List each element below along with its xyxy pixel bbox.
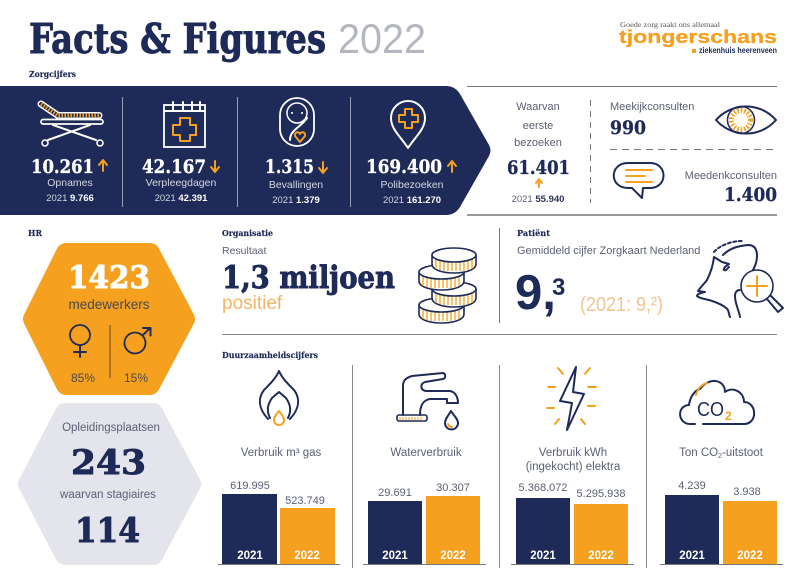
icon: location pin with cross	[391, 101, 425, 148]
panel: CO2 emissions: 2	[718, 453, 722, 460]
panel: training places hexagon: 243	[71, 443, 146, 483]
panel: organisation result: positief	[222, 293, 283, 314]
bar chart: electricity: 5.368.072	[519, 482, 567, 494]
stat: Opnames: 2021 9.766	[46, 193, 94, 204]
title: 2022	[338, 15, 426, 62]
panel: organisation result	[222, 228, 476, 323]
stat: first visits: eerste	[523, 120, 553, 132]
stat: Bevallingen: 1.315	[265, 156, 314, 178]
panel: patient score	[515, 228, 783, 320]
bar chart: gas	[218, 480, 340, 565]
title: Facts & Figures	[29, 15, 326, 63]
icon: coins	[419, 248, 476, 323]
logo	[619, 20, 777, 55]
stat: Polibezoeken: Polibezoeken	[380, 179, 444, 191]
stat: first visits: bezoeken	[514, 137, 562, 149]
icon: male symbol	[124, 328, 150, 354]
panel: electricity consumption: (ingekocht) elektra	[526, 461, 621, 473]
bar chart: CO2: 2022	[737, 550, 763, 562]
panel: gas consumption: Verbruik m³ gas	[241, 447, 322, 459]
panel: training places hexagon: Opleidingsplaatsen	[62, 422, 160, 434]
panel: organisation result: Organisatie	[222, 228, 273, 238]
panel: CO2 emissions	[660, 381, 783, 565]
panel: water consumption	[363, 373, 486, 565]
bar chart: CO2	[660, 480, 783, 565]
icon: swaddled baby	[280, 98, 314, 146]
panel: employees hexagon: 85%	[71, 371, 95, 385]
icon: flame	[260, 371, 298, 425]
panel: employees hexagon	[33, 253, 185, 385]
logo: ziekenhuis heerenveen	[699, 46, 777, 55]
stat: Bevallingen: 2021 1.379	[272, 195, 320, 206]
stat: Polibezoeken	[366, 156, 456, 206]
stat: Bevallingen: Bevallingen	[269, 179, 323, 191]
panel: organisation result: Resultaat	[222, 245, 266, 257]
stat: Meekijkconsulten: Meekijkconsulten	[610, 101, 694, 113]
icon: calendar with cross	[164, 102, 205, 147]
bar chart: water: 29.691	[378, 487, 412, 499]
icon: female symbol	[70, 325, 90, 357]
panel: employees hexagon: 15%	[124, 371, 148, 385]
panel: patient score: Patiënt	[517, 228, 550, 238]
icon: CO2 cloud: 2	[725, 409, 732, 423]
bar chart: CO2: 3.938	[733, 486, 761, 498]
panel: training places hexagon: waarvan stagiaires	[59, 489, 156, 501]
bar chart: gas: 523.749	[285, 495, 325, 507]
bar chart: water: 30.307	[436, 482, 470, 494]
panel: organisation result: 1,3 miljoen	[222, 260, 395, 296]
stat: Opnames: 10.261	[31, 156, 94, 178]
panel: training places hexagon: 114	[75, 511, 140, 551]
icon: faucet	[397, 373, 458, 430]
stat: Verpleegdagen: 2021 42.391	[155, 193, 208, 204]
panel: patient score: Gemiddeld cijfer Zorgkaart Nederland	[517, 245, 700, 257]
heading: Duurzaamheidscijfers: Duurzaamheidscijfers	[222, 350, 318, 360]
panel: CO2 emissions: -uitstoot	[722, 447, 764, 459]
stat: first visits	[507, 101, 570, 205]
stat: Bevallingen	[265, 156, 327, 206]
bar chart: CO2: 2021	[679, 550, 705, 562]
stat: Verpleegdagen: Verpleegdagen	[146, 177, 216, 189]
bar chart: water: 2021	[382, 550, 408, 562]
stat: Meedenkconsulten: 1.400	[724, 184, 777, 206]
icon: CO2 cloud: CO	[697, 399, 724, 421]
bar chart: gas: 2021	[237, 550, 263, 562]
panel: training places hexagon	[28, 413, 191, 555]
icon: map of the Netherlands with magnifier	[697, 241, 783, 317]
panel: employees hexagon: medewerkers	[68, 297, 150, 312]
stat: first visits: 2021 55.940	[512, 194, 564, 205]
icon: lightning bolt	[547, 367, 596, 430]
stat: Meekijkconsulten	[610, 101, 776, 139]
bar chart: electricity: 2021	[530, 550, 556, 562]
panel: electricity consumption: Verbruik kWh	[539, 447, 607, 459]
panel: patient score: 3	[552, 274, 565, 301]
stat: Meedenkconsulten: Meedenkconsulten	[685, 170, 777, 182]
bar chart: water: 2022	[440, 550, 466, 562]
stat: Verpleegdagen: 42.167	[142, 156, 206, 178]
panel: gas consumption	[218, 371, 340, 565]
stat: first visits: Waarvan	[516, 101, 560, 113]
heading: HR: HR	[28, 228, 42, 238]
stat: Opnames: Opnames	[47, 177, 93, 189]
stat: Meedenkconsulten	[614, 163, 777, 206]
stat: Opnames	[31, 156, 107, 204]
panel: CO2 emissions: Ton CO	[679, 447, 718, 459]
logo: tjongerschans	[619, 27, 777, 47]
panel: employees hexagon: 1423	[68, 260, 150, 296]
icon: hospital bed	[41, 104, 103, 146]
icon: speech bubble	[614, 163, 664, 198]
stat: Polibezoeken: 2021 161.270	[383, 195, 441, 206]
bar chart: water	[363, 482, 486, 565]
panel: water consumption: Waterverbruik	[390, 447, 462, 459]
bar chart: electricity	[511, 482, 634, 565]
heading: Zorgcijfers: Zorgcijfers	[29, 69, 76, 79]
bar chart: electricity: 5.295.938	[577, 488, 625, 500]
panel: patient score: (2021: 9,²)	[580, 294, 663, 316]
stat: first visits: 61.401	[507, 157, 570, 179]
panel: care figures banner	[0, 86, 490, 215]
panel: electricity consumption	[511, 367, 634, 565]
stat: Meekijkconsulten: 990	[610, 117, 646, 139]
bar chart: gas: 619.995	[230, 480, 270, 492]
bar chart: electricity: 2022	[588, 550, 614, 562]
logo: Goede zorg raakt ons allemaal	[620, 20, 720, 29]
bar chart: CO2: 4.239	[678, 480, 706, 492]
panel: patient score: 9,	[515, 266, 556, 320]
bar chart: gas: 2022	[294, 550, 320, 562]
icon: CO2 cloud	[680, 381, 754, 424]
stat: Verpleegdagen	[142, 156, 219, 204]
icon: eye	[716, 106, 776, 134]
stat: Polibezoeken: 169.400	[366, 156, 442, 178]
